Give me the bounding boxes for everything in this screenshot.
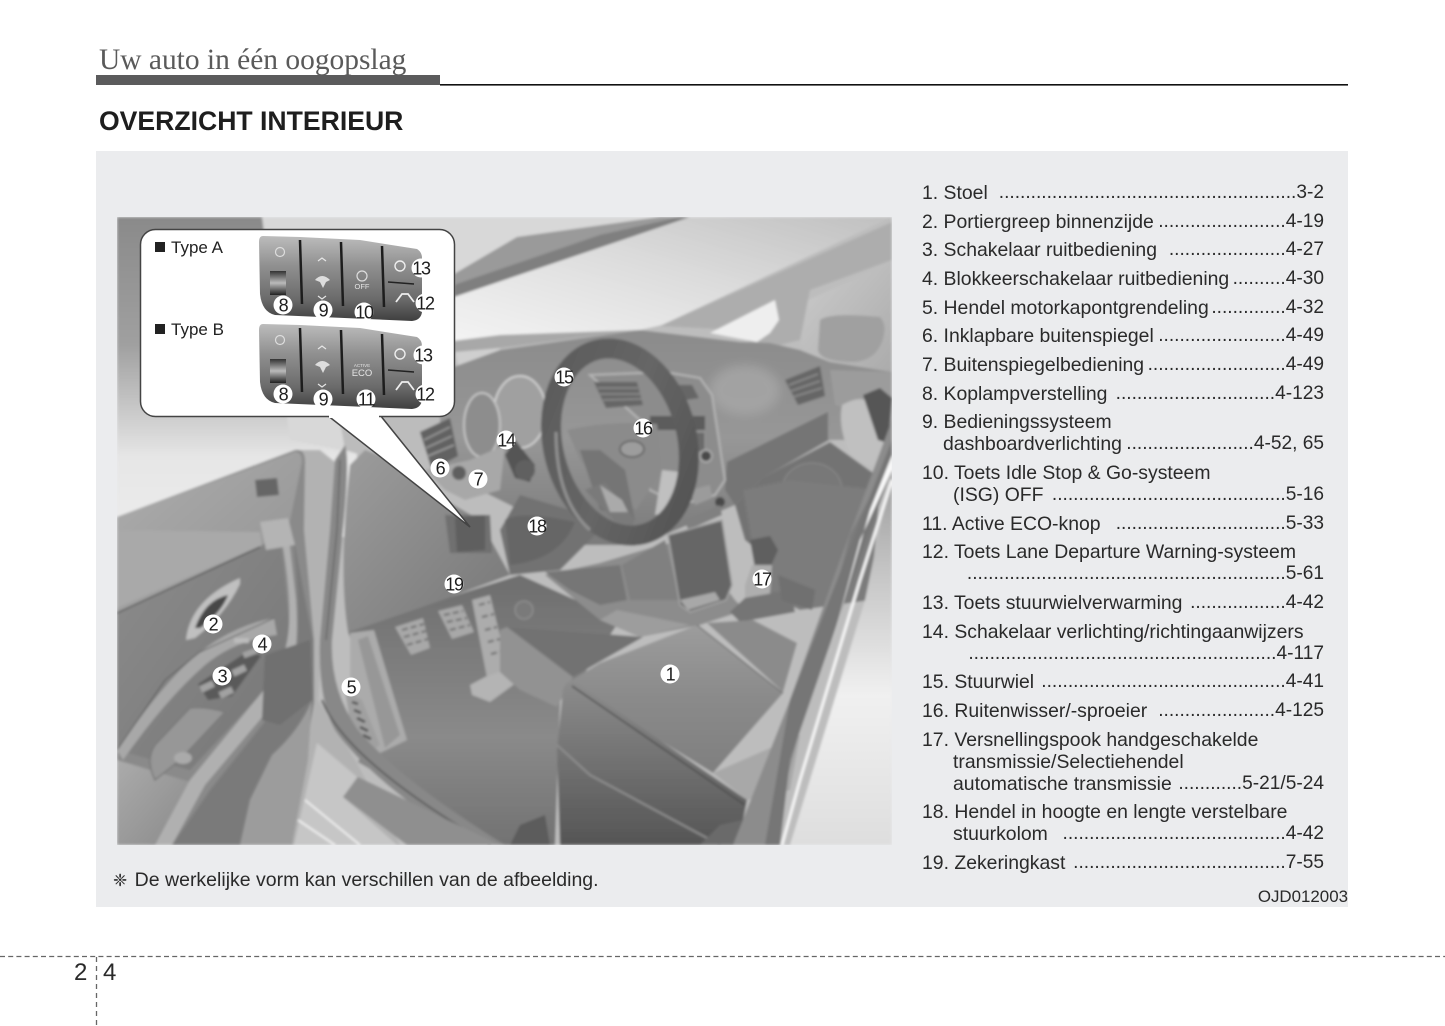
item 6 [922, 325, 1324, 347]
gauge cluster [494, 376, 546, 448]
number badges: 9 [319, 390, 329, 410]
label: type B: Type B [171, 320, 224, 339]
switch panel A: OFF [354, 282, 370, 291]
item 11: 11. Active ECO-knop [922, 513, 1101, 535]
page number [74, 959, 116, 986]
item 6: 6. Inklapbare buitenspiegel [922, 325, 1154, 347]
callout: switch panel types [140, 230, 470, 527]
item 12: 12. Toets Lane Departure Warning-systeem [922, 541, 1296, 563]
floor [348, 575, 620, 845]
item 3: ......................4-27 [1169, 239, 1324, 260]
item 16 [922, 700, 1324, 722]
item 9: 9. Bedieningssysteem [922, 411, 1112, 433]
number badges: 12 [416, 384, 435, 404]
item 11 [922, 513, 1324, 535]
centre console [545, 540, 745, 637]
number badges: 18 [528, 516, 547, 536]
sill [294, 743, 397, 845]
item 12 continued: ............................................................5-61 [967, 563, 1324, 584]
switch panel A [259, 236, 422, 321]
number badges: 2 [209, 614, 219, 634]
item 17 line 3 [953, 773, 1324, 795]
steering wheel rim [532, 334, 708, 550]
item 3 [922, 239, 1324, 261]
left door shut face [285, 450, 400, 845]
page number: 2 [74, 959, 87, 986]
steering wheel hub [567, 423, 662, 510]
number badges: 7 [474, 470, 484, 490]
number badges: 13 [412, 258, 431, 278]
stalk [505, 440, 535, 482]
number badges: 8 [279, 296, 289, 316]
number badges: 11 [358, 390, 375, 410]
door switches [198, 650, 261, 700]
number badges: 17 [753, 570, 772, 590]
item 18 continued [953, 823, 1324, 845]
item 19: 19. Zekeringkast [922, 852, 1065, 874]
item 2: 2. Portiergreep binnenzijde [922, 211, 1154, 233]
number badges [204, 258, 772, 698]
gear lever [743, 480, 880, 610]
item 15: 15. Stuurwiel [922, 671, 1034, 693]
number badges: 12 [416, 294, 435, 314]
page footer dashed guides [0, 956, 1445, 1025]
item 9 continued: ........................4-52, 65 [1126, 433, 1324, 454]
item 13: ..................4-42 [1190, 592, 1324, 613]
item 7: ..........................4-49 [1148, 354, 1324, 375]
item 18: 18. Hendel in hoogte en lengte verstelbare [922, 801, 1287, 823]
image code: OJD012003 [1258, 887, 1348, 906]
item 1: 1. Stoel [922, 182, 988, 204]
dashboard top [440, 330, 892, 545]
item 8 [922, 383, 1324, 405]
item 9 continued: dashboardverlichting [943, 433, 1122, 455]
item 3: 3. Schakelaar ruitbediening [922, 239, 1157, 261]
dash underside [500, 495, 600, 575]
number badges: 1 [666, 664, 676, 684]
item 6: ........................4-49 [1158, 325, 1324, 346]
item 16: ......................4-125 [1158, 700, 1324, 721]
glove box [725, 412, 828, 505]
item 19: ........................................7-55 [1073, 852, 1324, 873]
item 7: 7. Buitenspiegelbediening [922, 354, 1144, 376]
item 10 continued: (ISG) OFF [953, 484, 1043, 506]
windshield [454, 217, 892, 345]
label: type A: Type A [171, 238, 224, 257]
illustration: car interior with numbered callouts [117, 217, 892, 845]
number badges: 10 [355, 302, 374, 322]
page number: 4 [103, 959, 116, 986]
item 14: 14. Schakelaar verlichting/richtingaanwijzers [922, 621, 1304, 643]
item 8: ..............................4-123 [1116, 383, 1324, 404]
item 4: 4. Blokkeerschakelaar ruitbediening [922, 268, 1229, 290]
item 17 line 3: automatische transmissie [953, 773, 1172, 795]
footrest and left carpet panels [500, 627, 643, 707]
right door pillar and bright exterior [790, 470, 892, 845]
item 10: 10. Toets Idle Stop & Go-systeem [922, 462, 1210, 484]
item 15: ..............................................4-41 [1041, 671, 1324, 692]
item 9 continued [943, 433, 1324, 455]
item 10 continued: ............................................5-16 [1052, 484, 1324, 505]
item 19 [922, 852, 1324, 874]
number badges: 16 [634, 418, 653, 438]
footnote: ❈ De werkelijke vorm kan verschillen van de afbeelding. [113, 869, 599, 891]
number badges: 15 [555, 368, 574, 388]
item 14 continued: ..........................................................4-117 [968, 643, 1324, 664]
number badges: 9 [319, 300, 329, 320]
chapter title: Uw auto in één oogopslag [99, 44, 406, 76]
item 11: ................................5-33 [1116, 513, 1324, 534]
item 5: 5. Hendel motorkapontgrendeling [922, 297, 1209, 319]
item 2: ........................4-19 [1158, 211, 1324, 232]
pedals [395, 618, 430, 655]
seat [707, 620, 797, 692]
switch panel B [259, 324, 422, 409]
item 15 [922, 671, 1324, 693]
switch panel B: ECO [352, 368, 372, 379]
item 17 line 3: ............5-21/5-24 [1178, 773, 1324, 794]
item 7 [922, 354, 1324, 376]
item 13 [922, 592, 1324, 614]
number badges: 4 [258, 634, 268, 654]
right pillar and side window [660, 222, 892, 345]
number badges: 6 [436, 458, 446, 478]
item 13: 13. Toets stuurwielverwarming [922, 592, 1182, 614]
item 1: ........................................................3-2 [999, 182, 1324, 203]
item 4: ..........4-30 [1233, 268, 1324, 289]
item 2 [922, 211, 1324, 233]
door panel [117, 450, 314, 845]
switch panel B: ACTIVE [354, 363, 370, 368]
door pocket [150, 708, 225, 780]
centre stack [590, 372, 725, 505]
number badges: 13 [414, 346, 433, 366]
item 17: 17. Versnellingspook handgeschakelde [922, 729, 1258, 751]
car interior artwork [117, 217, 892, 845]
contents list [922, 182, 1324, 874]
number badges: 5 [347, 678, 357, 698]
panel: interior overview background [96, 151, 1348, 907]
kick panel [343, 450, 510, 632]
item 5: ..............4-32 [1211, 297, 1324, 318]
vent strip [345, 690, 380, 750]
number badges: 14 [497, 430, 516, 450]
number badges: 19 [445, 574, 464, 594]
number badges: 3 [218, 666, 228, 686]
item 18 continued: ..........................................4-42 [1063, 823, 1324, 844]
section heading: OVERZICHT INTERIEUR [99, 106, 403, 136]
item 16: 16. Ruitenwisser/-sproeier [922, 700, 1147, 722]
door handle [186, 578, 240, 640]
item 8: 8. Koplampverstelling [922, 383, 1107, 405]
header rule [96, 75, 1348, 86]
item 18 continued: stuurkolom [953, 823, 1048, 845]
number badges: 8 [279, 384, 289, 404]
item 17 line 2: transmissie/Selectiehendel [953, 751, 1184, 773]
